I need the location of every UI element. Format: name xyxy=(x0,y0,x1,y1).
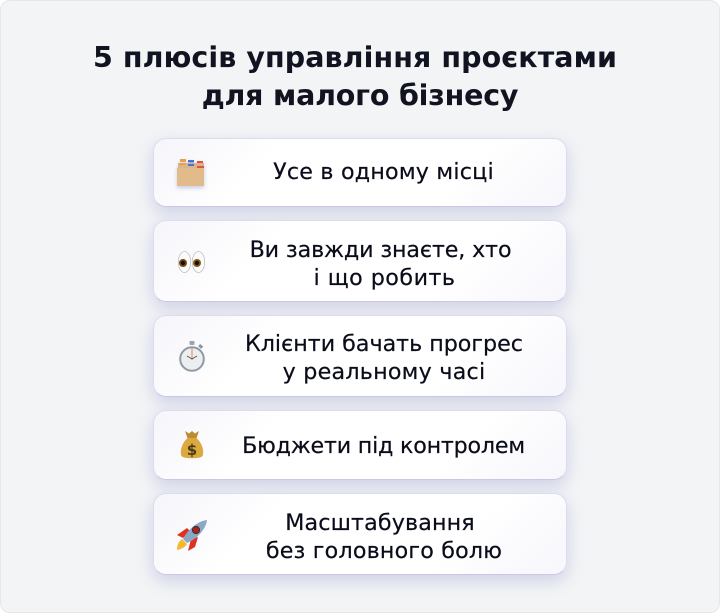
text: без головного болю xyxy=(266,538,502,564)
text: і що робить xyxy=(313,264,456,290)
title xyxy=(93,41,617,112)
title: 5 плюсів управління проєктами xyxy=(93,41,617,74)
icon: card file box xyxy=(175,159,206,190)
card: budgets under control xyxy=(153,410,567,480)
card: always know who does what xyxy=(153,220,567,302)
text xyxy=(266,510,502,564)
text: у реальному часі xyxy=(283,358,485,384)
text xyxy=(250,237,511,290)
icon: money bag xyxy=(180,431,204,459)
text: Масштабування xyxy=(285,510,475,536)
icon: rocket xyxy=(177,520,207,551)
icon: eyes xyxy=(178,251,206,273)
card: scaling without headache xyxy=(153,493,567,575)
icon: stopwatch xyxy=(179,341,205,372)
card: clients see progress xyxy=(153,315,567,397)
text: Ви завжди знаєте, хто xyxy=(250,237,511,263)
text: Усе в одному місці xyxy=(273,159,494,185)
card: everything in one place xyxy=(153,138,567,207)
icon: money bag: $ xyxy=(187,441,197,459)
text: Бюджети під контролем xyxy=(242,433,525,459)
title: для малого бізнесу xyxy=(202,79,518,112)
text: Клієнти бачать прогрес xyxy=(245,331,523,357)
text xyxy=(245,331,523,384)
